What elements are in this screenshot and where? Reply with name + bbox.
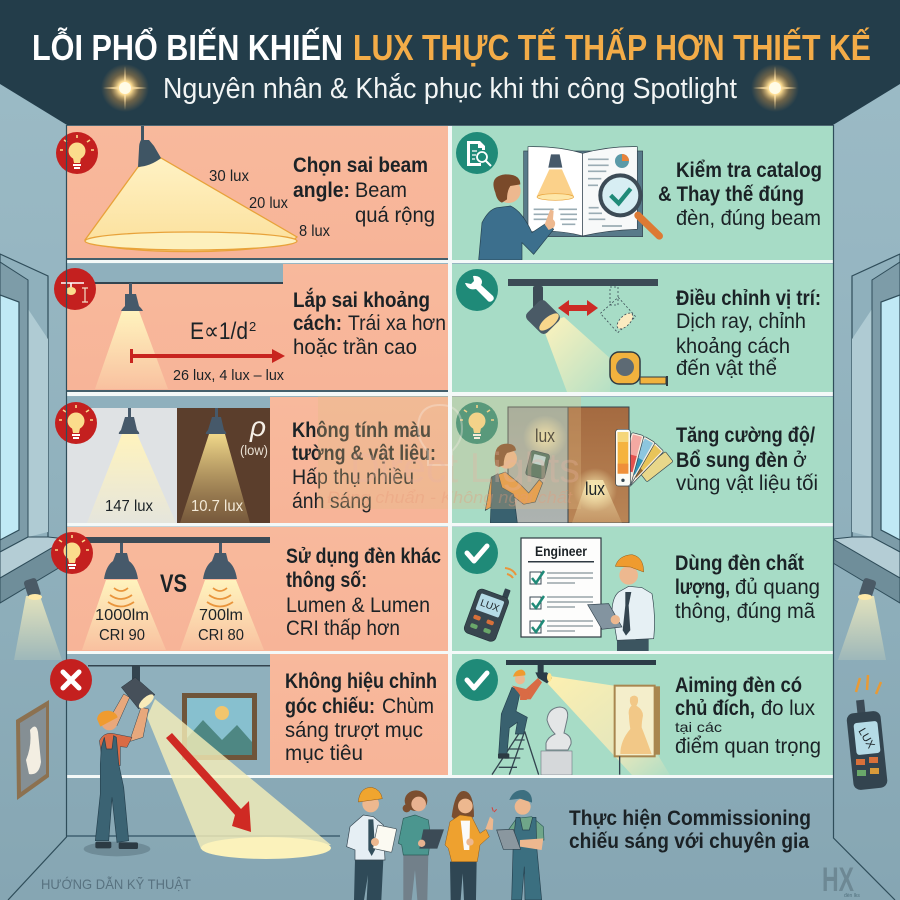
- title: [32, 25, 871, 68]
- icon: row 3 red bulb: [55, 402, 97, 444]
- problem text: Lắp sai khoảng: [293, 288, 430, 312]
- icon: wrench: [456, 269, 498, 311]
- glow on wood wall: [573, 468, 617, 512]
- panel: row 3 problem — wall colour and material: [67, 397, 448, 524]
- expert with cap and overalls: [497, 790, 544, 900]
- left wall spotlight: [14, 577, 62, 660]
- framed sculpture picture: [615, 686, 660, 775]
- framed landscape picture: [182, 693, 257, 760]
- beam: [542, 317, 612, 392]
- lux label grey: lux: [535, 426, 555, 446]
- problem text: Chọn sai beam: [293, 154, 428, 177]
- fix text: đến vật thể: [676, 357, 777, 380]
- reading 147 lux: 147 lux: [105, 498, 153, 515]
- glow on grey wall: [523, 415, 567, 459]
- problem text: Không hiệu chỉnh: [285, 670, 437, 693]
- lamp left: [104, 543, 138, 579]
- lux label 8: 8 lux: [299, 223, 330, 240]
- right wall spotlight: [838, 577, 886, 660]
- track: [85, 537, 270, 543]
- cone left: [82, 580, 166, 650]
- fix text: đủ quang: [735, 576, 820, 599]
- fix text: ở: [793, 449, 807, 472]
- fix text: chủ đích,: [675, 697, 755, 720]
- person with meter: [485, 444, 550, 523]
- fix text: Kiểm tra catalog: [676, 159, 822, 182]
- right window: [833, 254, 900, 603]
- red double arrow: [558, 300, 598, 316]
- row 5 track: [88, 665, 270, 666]
- left wall framed painting: [16, 700, 49, 800]
- fix text: đo lux: [761, 697, 815, 720]
- fix text: khoảng cách: [676, 335, 790, 358]
- grey wall: [508, 407, 568, 523]
- light waves left: [108, 588, 134, 606]
- problem text: CRI thấp hơn: [286, 617, 400, 640]
- panel: row 2 problem — wrong distance: [67, 264, 448, 392]
- fix text: [676, 287, 821, 380]
- panel: row 1 fix — check catalog: [452, 126, 833, 260]
- panel: row 4 fix — quality lamps: [452, 527, 833, 651]
- ceiling band: [0, 0, 900, 125]
- lux readings: 26 lux, 4 lux – lux: [173, 367, 284, 384]
- fix text: tại các: [675, 719, 722, 735]
- icon: teal check: [456, 659, 498, 701]
- wide beam cone: [85, 158, 297, 252]
- spec left: 1000lm: [95, 607, 149, 624]
- icon: bulb teal: [456, 402, 498, 444]
- beam: [95, 311, 168, 389]
- panel: row 1 problem — wrong beam angle: [67, 126, 448, 260]
- light waves right: [207, 588, 233, 606]
- right wall lux meter: [846, 675, 888, 791]
- bottom call to action: Thực hiện Commissioning: [569, 807, 811, 830]
- magnifier: [600, 175, 659, 236]
- problem text: sáng trượt mục: [285, 719, 423, 742]
- bottom call to action: [569, 807, 811, 853]
- catalog book: [524, 147, 643, 237]
- red arrow: beam misses target: [166, 733, 251, 832]
- logo HK: HX: [822, 861, 854, 899]
- problem text: [292, 419, 436, 513]
- track: [506, 660, 656, 665]
- colour swatch fan: [616, 429, 673, 487]
- spec right: CRI 80: [198, 627, 244, 644]
- tape measure: [610, 352, 668, 386]
- problem text: Beam: [355, 179, 407, 202]
- watermark: Đúng chuẩn - Không ngại chất: [327, 488, 573, 507]
- left window: [0, 254, 67, 603]
- watermark: Direct Lights: [350, 444, 580, 491]
- lux label 20: 20 lux: [249, 195, 288, 212]
- problem text: [285, 670, 437, 765]
- watermark: [318, 395, 581, 509]
- fix text: [675, 674, 821, 758]
- ladder: [492, 731, 539, 775]
- problem text: Chùm: [382, 695, 434, 718]
- lamp right: [206, 408, 226, 434]
- fix text: Tăng cường độ/: [676, 424, 815, 447]
- panel: row 5 problem — no aiming adjustment: [67, 654, 448, 775]
- bottom call to action: chiếu sáng với chuyên gia: [569, 830, 809, 853]
- fix text: & Thay thế đúng: [658, 183, 804, 206]
- row 5 misaimed beam with pool: [147, 699, 331, 859]
- icon: row 4 red bulb: [51, 532, 93, 574]
- bust: [546, 707, 571, 750]
- pendant lamp: [121, 283, 143, 311]
- icon: row 5 red cross: [50, 659, 92, 701]
- low label: (low): [240, 442, 268, 458]
- fix text: Dịch ray, chỉnh: [676, 310, 806, 333]
- problem text: [293, 288, 446, 359]
- flare left: [101, 64, 149, 112]
- red distance arrow: [130, 349, 285, 363]
- fix text: Bổ sung đèn: [676, 449, 788, 472]
- problem text: tường & vật liệu:: [292, 442, 436, 465]
- track: [508, 279, 658, 286]
- formula: E∝1/d: [190, 318, 248, 345]
- wifi signal: [505, 568, 516, 578]
- light cone on pale wall: [87, 434, 176, 523]
- lux meter: LUX: [479, 598, 501, 615]
- icon: teal check: [456, 532, 498, 574]
- problem text: mục tiêu: [285, 742, 363, 765]
- worker adjusting spotlight: [84, 694, 150, 856]
- problem text: Sử dụng đèn khác: [286, 545, 441, 568]
- title: LỖI PHỔ BIẾN KHIẾN: [32, 25, 343, 68]
- icon: row 1 red bulb: [56, 132, 98, 174]
- spec right: 700lm: [199, 607, 243, 624]
- fix text: [676, 424, 818, 495]
- flare right: [751, 64, 799, 112]
- lux label 30: 30 lux: [209, 168, 249, 185]
- panel: row 3 fix — boost intensity: [452, 397, 833, 524]
- panel: row 2 fix — adjust position: [452, 264, 833, 393]
- fix text: điểm quan trọng: [675, 735, 821, 758]
- expert in teal shirt: [398, 790, 444, 900]
- pendant lamp: [138, 126, 161, 167]
- panel: row 5 fix — intentional aiming: [452, 654, 833, 775]
- problem text: quá rộng: [355, 204, 435, 227]
- expert in orange blazer: [445, 791, 497, 900]
- dashed ghost spotlight: [600, 287, 636, 333]
- problem text: thông số:: [286, 569, 367, 592]
- light cone on dark wood: [180, 434, 250, 523]
- four commissioning experts: [347, 787, 544, 900]
- fix text: lượng,: [675, 576, 730, 599]
- problem text: Không tính màu: [292, 419, 431, 442]
- spec left: CRI 90: [99, 627, 145, 644]
- spot aimed: [535, 665, 552, 683]
- exponent: 2: [249, 319, 256, 334]
- problem text: góc chiếu:: [285, 695, 375, 718]
- spec left: [95, 607, 149, 644]
- spec right: [198, 607, 244, 644]
- expert with hard hat: [347, 787, 397, 900]
- problem text: ánh sáng: [292, 490, 372, 513]
- fix text: Điều chỉnh vị trí:: [676, 287, 821, 310]
- beam pool: [85, 232, 297, 250]
- problem text: [293, 154, 435, 227]
- problem text: [286, 545, 441, 640]
- logo HK: đèn lks: [844, 893, 860, 899]
- vs: VS: [160, 570, 187, 598]
- footer label: HƯỚNG DẪN KỸ THUẬT: [41, 876, 191, 892]
- problem text: Hấp thụ nhiều: [292, 466, 414, 489]
- lamp left: [119, 408, 139, 434]
- right wall lux meter: LUX: [856, 726, 877, 751]
- fix text: [658, 159, 822, 230]
- reading 10.7 lux: 10.7 lux: [191, 498, 243, 515]
- engineer figure: [588, 555, 655, 651]
- fix text: Dùng đèn chất: [675, 552, 804, 575]
- lux meter: [463, 580, 513, 643]
- problem text: Lumen & Lumen: [286, 594, 430, 617]
- problem text: Trái xa hơn: [348, 312, 446, 335]
- fix text: Aiming đèn có: [675, 674, 802, 697]
- problem text: cách:: [293, 312, 342, 335]
- cone right: [180, 580, 264, 650]
- icon: document search: [456, 132, 498, 174]
- wood wall: [568, 407, 629, 523]
- fix text: đèn, đúng beam: [676, 207, 821, 230]
- problem text: hoặc trần cao: [293, 336, 417, 359]
- lamp right: [203, 543, 237, 579]
- fix text: vùng vật liệu tối: [676, 472, 818, 495]
- misaimed spotlight fixture: [121, 666, 156, 711]
- rho symbol: ρ: [249, 411, 266, 442]
- icon: row 2 red track light: [54, 268, 96, 310]
- lux label wood: lux: [585, 479, 605, 499]
- problem text: angle:: [293, 179, 350, 202]
- subtitle: Nguyên nhân & Khắc phục khi thi công Spotlight: [163, 72, 737, 105]
- engineer checklist: Engineer: [535, 543, 587, 559]
- engineer checklist: [521, 538, 601, 637]
- pedestal: [541, 751, 572, 775]
- worker on ladder: [498, 670, 542, 759]
- aimed beam: [548, 676, 670, 775]
- fix text: [675, 552, 820, 623]
- spotlight: [524, 286, 562, 336]
- fix text: thông, đúng mã: [675, 600, 815, 623]
- person pointing: [479, 174, 555, 260]
- panel: row 4 problem — different specs: [67, 527, 448, 651]
